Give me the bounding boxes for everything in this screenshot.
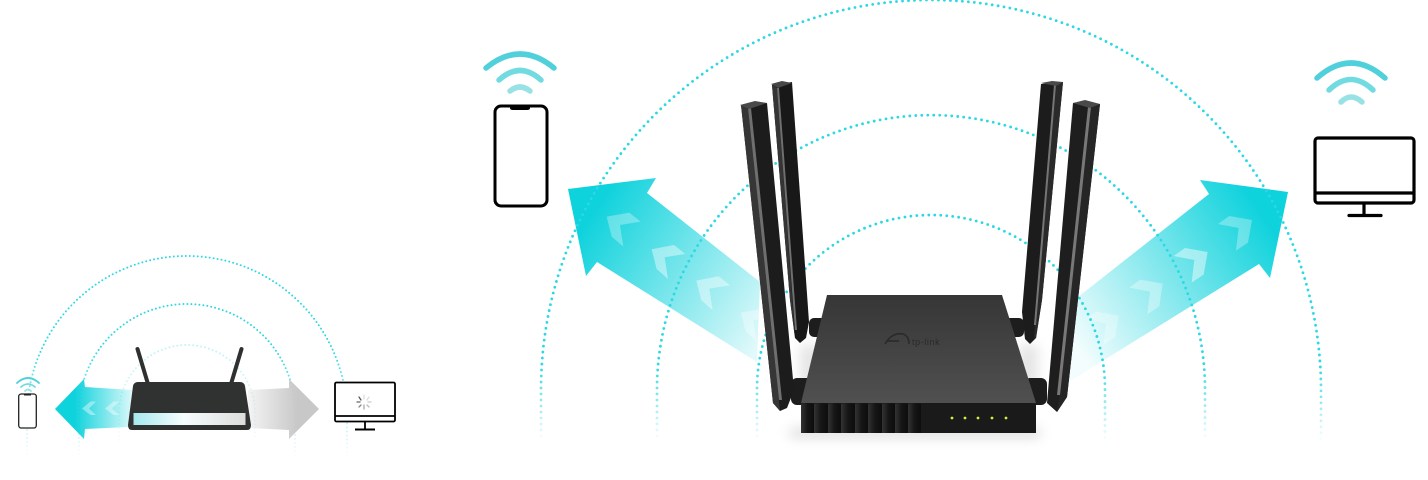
router top surface: [801, 295, 1036, 403]
small antennas: [138, 349, 242, 384]
chevrons: left arrow: [607, 213, 770, 342]
antenna hinges: [791, 318, 1047, 405]
front left antenna: [740, 101, 794, 411]
small arrow: right: [248, 379, 319, 439]
icon: phone wifi: [486, 54, 554, 91]
coverage arcs: small router: [27, 256, 347, 458]
icon: monitor wifi: [1317, 63, 1385, 102]
router front panel: [801, 403, 1036, 433]
icon: small phone: [19, 394, 36, 428]
rear left antenna: [771, 81, 809, 343]
logo: [885, 334, 940, 347]
big arrow: right to monitor: [1067, 180, 1288, 383]
icon: small monitor: [335, 382, 395, 430]
icon: phone: [495, 106, 547, 206]
chevrons: right arrow: [1087, 216, 1252, 345]
small router window: [134, 413, 246, 425]
big arrow: left to phone: [568, 178, 770, 362]
router shadow: [790, 345, 1040, 438]
front vents: [801, 403, 921, 433]
LEDs: [951, 417, 1007, 419]
small router: [128, 349, 251, 430]
logo: tp-link: [912, 337, 940, 347]
icon: monitor: [1315, 138, 1414, 216]
large router: [740, 81, 1100, 438]
loading spinner: [357, 395, 371, 409]
icon: small phone wifi: [17, 378, 39, 391]
front right antenna: [1047, 100, 1100, 412]
rear right antenna: [1022, 81, 1063, 344]
small router body: [128, 382, 251, 430]
small chevrons: [82, 402, 119, 415]
coverage arcs: large router: [541, 0, 1321, 442]
small arrow: left: [55, 379, 132, 439]
